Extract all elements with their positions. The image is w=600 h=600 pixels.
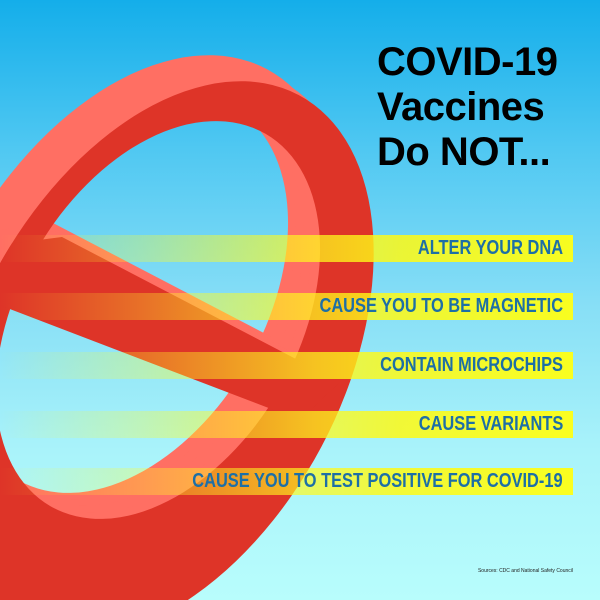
title: COVID-19	[377, 40, 558, 84]
title: Do NOT...	[377, 130, 550, 174]
sources note: Sources: CDC and National Safety Council	[478, 568, 573, 574]
item: variants	[0, 411, 573, 438]
title: Vaccines	[377, 85, 544, 129]
item: magnetic	[0, 293, 573, 320]
item: test positive: CAUSE YOU TO TEST POSITIVE FOR COVID-19	[193, 470, 563, 492]
item: variants: CAUSE VARIANTS	[418, 413, 563, 435]
item: alter your DNA: ALTER YOUR DNA	[418, 237, 563, 259]
item: microchips: CONTAIN MICROCHIPS	[380, 354, 563, 376]
title	[377, 40, 558, 174]
item: microchips	[0, 352, 573, 379]
item: test positive	[0, 468, 573, 495]
icon: prohibition sign	[0, 55, 374, 600]
item: alter your DNA	[0, 235, 573, 262]
item: magnetic: CAUSE YOU TO BE MAGNETIC	[319, 295, 563, 317]
